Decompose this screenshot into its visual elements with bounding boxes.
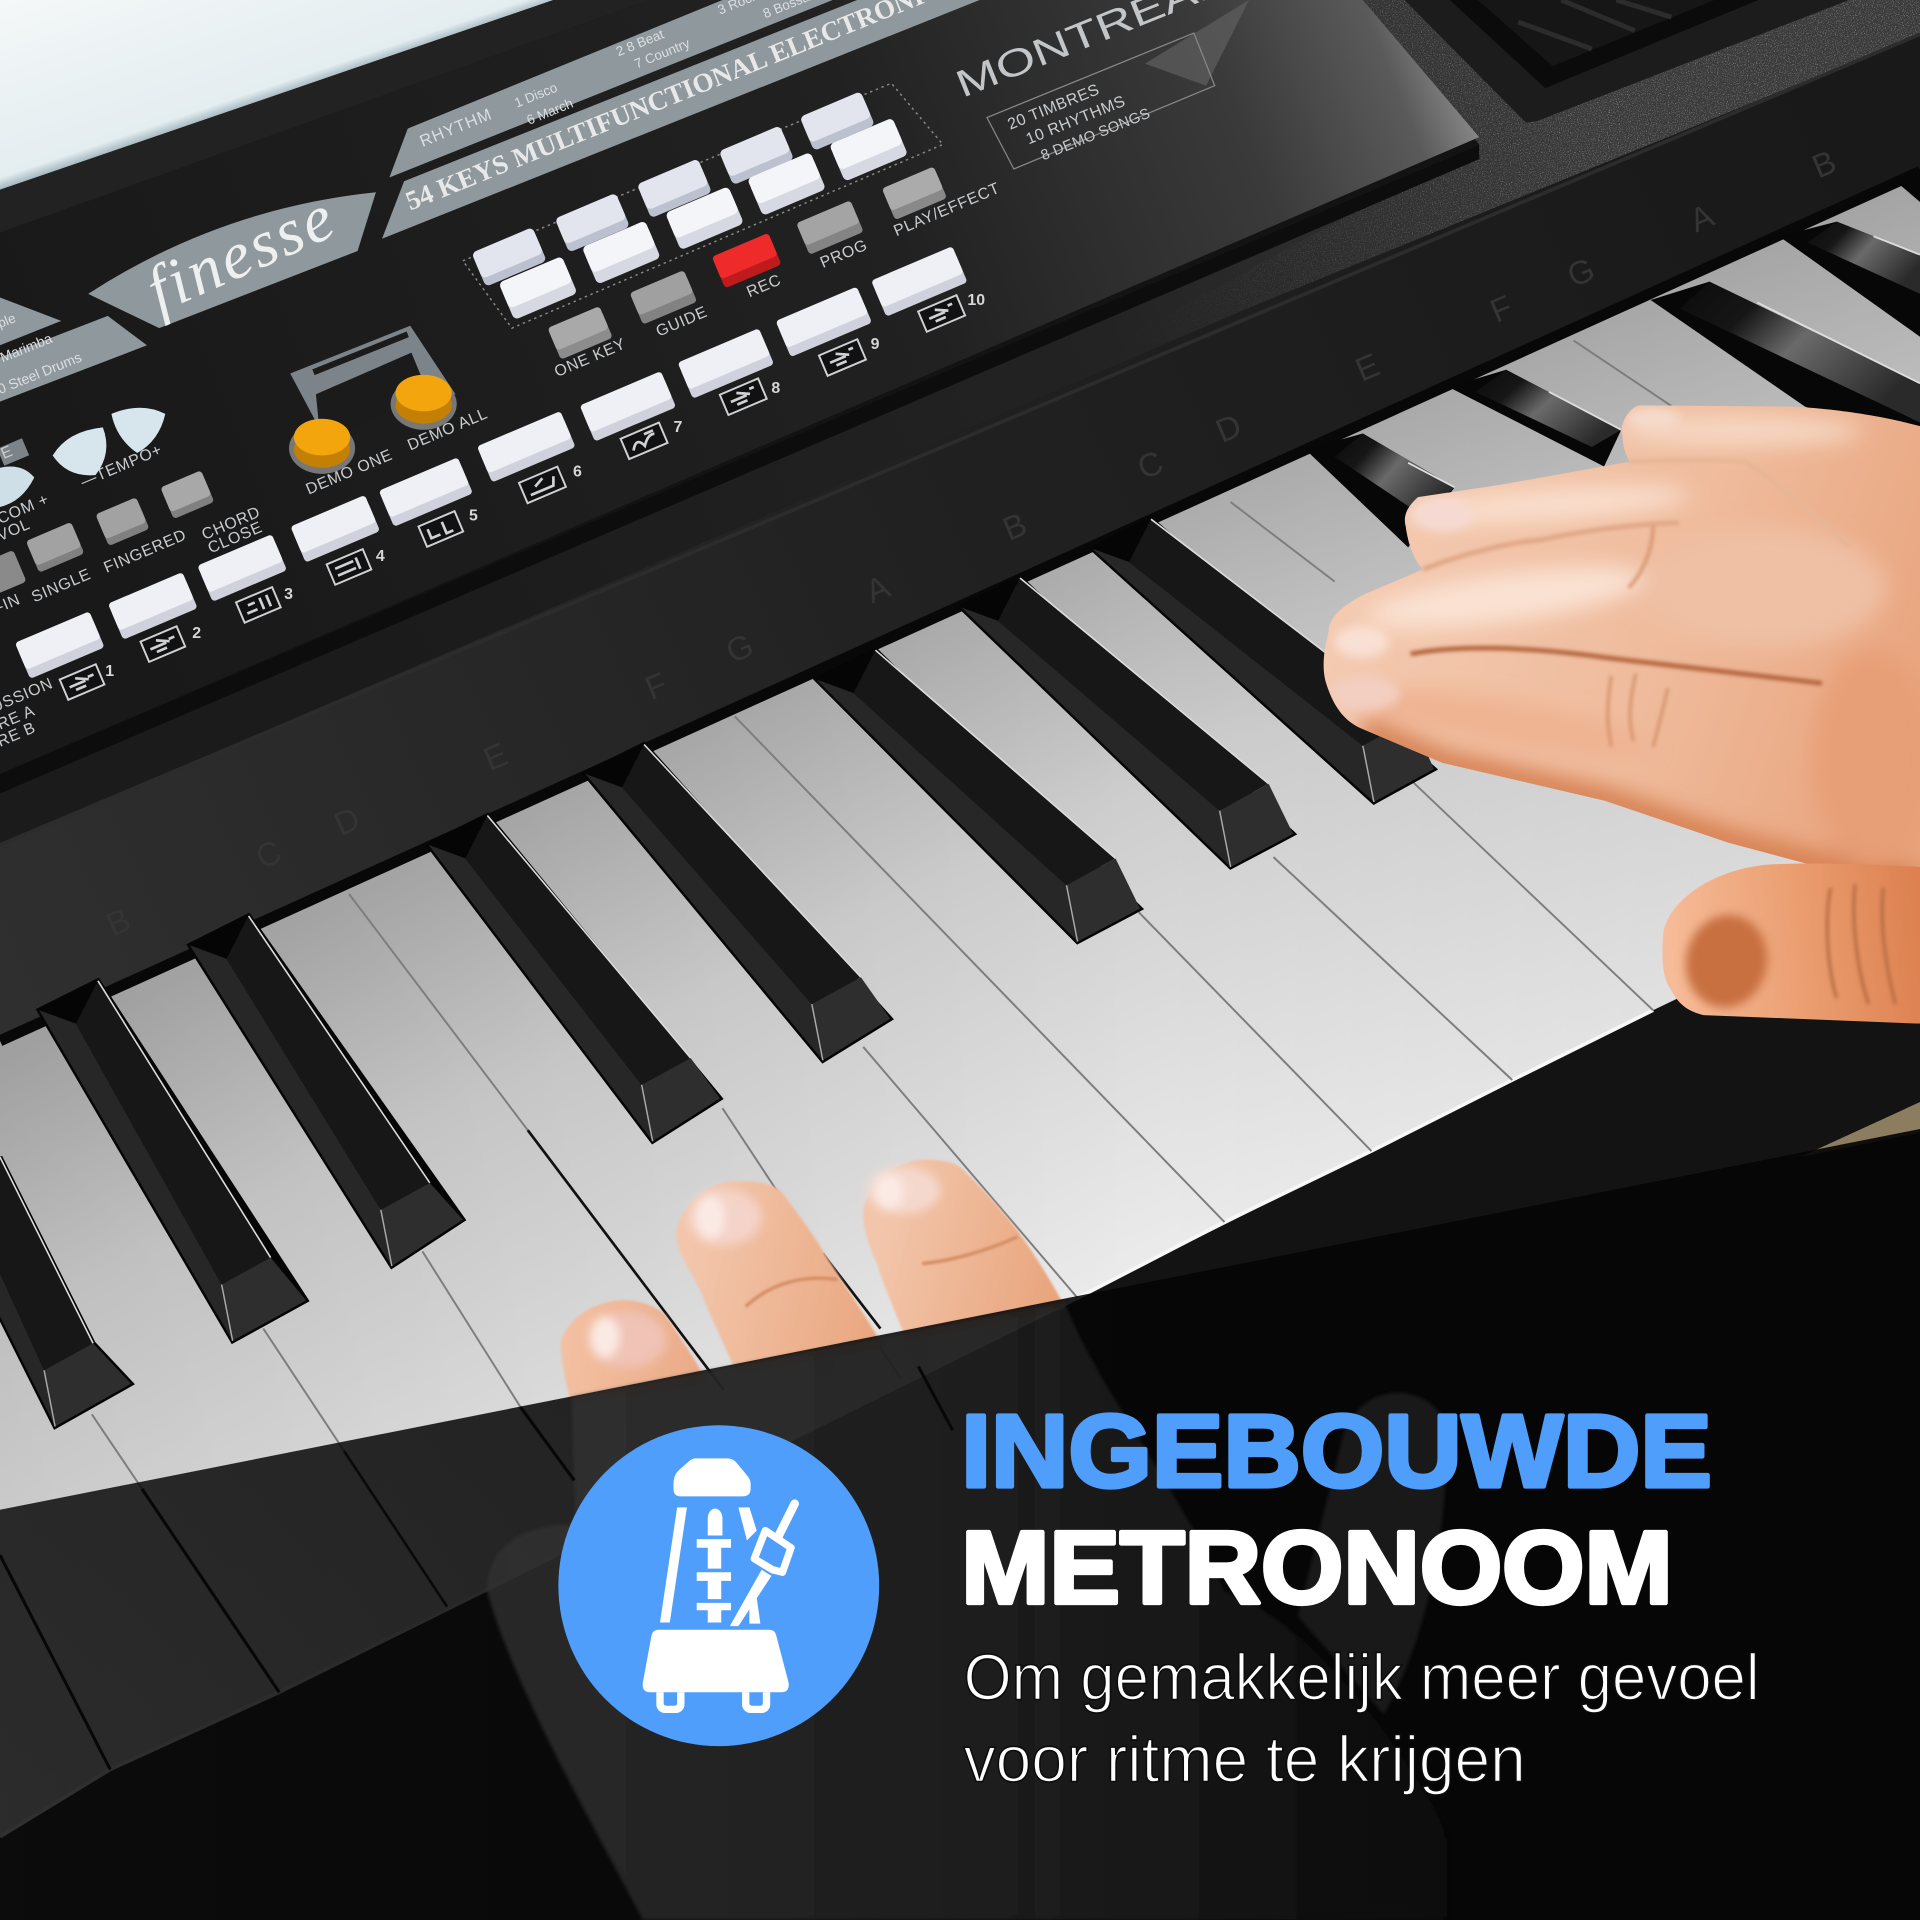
tempo and volume buttons <box>0 408 165 507</box>
thumb <box>1653 857 1920 1029</box>
speaker area <box>1404 0 1849 122</box>
panel band text: RHYTHM <box>417 104 495 151</box>
bright background corner <box>0 0 553 190</box>
function labels: REC <box>744 272 784 301</box>
key 1 <box>1092 519 1434 802</box>
finger three <box>863 1160 1065 1341</box>
note letters: D <box>1211 407 1247 451</box>
note letters: F <box>640 666 673 708</box>
function labels <box>0 180 1003 751</box>
instrument icons and numbers: 7 <box>673 419 682 436</box>
ghosted hand under overlay <box>487 1302 1451 1920</box>
instrument icons and numbers: 4 <box>376 548 385 565</box>
instrument icons and numbers: 5 <box>469 507 478 524</box>
note letters: C <box>251 833 287 877</box>
note letters: D <box>329 800 366 844</box>
panel band text: 2 8 Beat <box>614 26 666 59</box>
orange demo buttons <box>294 375 452 468</box>
black keys <box>0 169 1920 1427</box>
key 4 <box>585 744 890 1060</box>
red record button <box>712 233 782 288</box>
panel band text: 7 Country <box>632 35 692 71</box>
key 7 <box>39 981 306 1341</box>
instrument icons and numbers: 2 <box>192 625 201 642</box>
tan reflection at right edge <box>1800 1102 1920 1157</box>
textured upper strip <box>0 0 1920 845</box>
instrument icons and numbers <box>60 292 985 700</box>
dark key gaps near fingers <box>142 1130 880 1692</box>
control panel <box>0 0 1479 774</box>
description text <box>964 1641 1760 1796</box>
instrument icons and numbers: 10 <box>967 292 985 309</box>
finger two <box>676 1181 884 1374</box>
function labels: —TEMPO+ <box>78 441 165 491</box>
function buttons <box>548 166 947 360</box>
function labels: DEMO ONE <box>303 447 395 498</box>
back shadow <box>0 171 1920 1041</box>
skin shading <box>1358 416 1920 883</box>
music note with demo buttons <box>289 326 457 474</box>
finger nails <box>588 1167 940 1368</box>
key 6 <box>190 916 463 1266</box>
key front lip <box>0 1010 1653 1837</box>
left hand fingertips <box>561 1160 1065 1406</box>
feature list box: 20 TIMBRES <box>1005 81 1102 134</box>
instrument icons and numbers: 1 <box>105 663 114 680</box>
function labels: CHORD <box>199 504 263 544</box>
function labels: SINGLE <box>29 566 94 606</box>
key 3 <box>817 650 1140 942</box>
note letters: E <box>1350 347 1385 389</box>
top rim of keyboard <box>0 0 649 233</box>
description text: voor ritme te krijgen <box>964 1723 1526 1796</box>
key 2 <box>961 578 1293 867</box>
grey branding bands <box>0 0 980 402</box>
note letters: A <box>1685 197 1719 240</box>
metronome badge <box>558 1425 879 1746</box>
lower instrument buttons <box>15 246 968 679</box>
heading: metronoom: METRONOOM <box>961 1510 1673 1625</box>
front strip with note letters <box>0 0 1920 1041</box>
dark key gaps under overlay <box>0 1367 953 1769</box>
note letters: G <box>1562 251 1600 295</box>
function labels: PROG <box>818 237 870 272</box>
hatch triangle <box>1145 0 1249 86</box>
note letters: F <box>1485 289 1518 331</box>
panel band text <box>0 0 946 397</box>
note letters: B <box>101 901 136 944</box>
instrument icons and numbers: 8 <box>771 380 780 397</box>
finger nails <box>1331 408 1680 710</box>
function labels: ONE KEY <box>552 336 629 381</box>
note letters: B <box>998 506 1032 549</box>
icon: metronome <box>643 1458 795 1713</box>
finesse logo: finesse <box>136 181 344 327</box>
dark overlay panel <box>0 1129 1920 1920</box>
panel band text: 6 March <box>524 96 575 128</box>
note letters <box>101 143 1842 944</box>
ghosted thumb <box>1298 1393 1446 1714</box>
feature list box: 10 RHYTHMS <box>1024 93 1128 148</box>
style buttons <box>0 470 214 601</box>
note letters: G <box>721 627 759 671</box>
instrument icons and numbers: 9 <box>871 336 880 353</box>
instrument icons and numbers: 3 <box>284 586 293 603</box>
feature list box: 8 DEMO SONGS <box>1039 106 1153 164</box>
right hand <box>1310 392 1920 1029</box>
dotted selector outline <box>463 83 943 328</box>
description text: Om gemakkelijk meer gevoel <box>964 1641 1760 1714</box>
function labels: GUIDE <box>654 304 710 340</box>
key 8 <box>0 1157 131 1427</box>
note letters: B <box>1807 143 1842 186</box>
key 5 <box>429 816 720 1141</box>
function labels: PLAY/EFFECT <box>891 180 1003 240</box>
note letters: C <box>1132 444 1169 487</box>
note letters: A <box>861 568 895 611</box>
panel band text: 1 Disco <box>512 80 559 111</box>
function labels: DEMO ALL <box>405 405 490 454</box>
Montreal label <box>950 0 1249 169</box>
finger one <box>561 1300 708 1406</box>
feature list box <box>987 33 1215 169</box>
function labels: FINGERED <box>101 527 189 577</box>
heading: ingebouwde: INGEBOUWDE <box>961 1394 1712 1509</box>
function labels: CLOSE <box>206 519 265 557</box>
upper white preset buttons <box>472 91 908 320</box>
finger creases <box>1411 460 1850 747</box>
instrument icons and numbers: 6 <box>573 463 582 480</box>
note letters: E <box>478 736 513 779</box>
far right black keys <box>1305 169 1920 547</box>
